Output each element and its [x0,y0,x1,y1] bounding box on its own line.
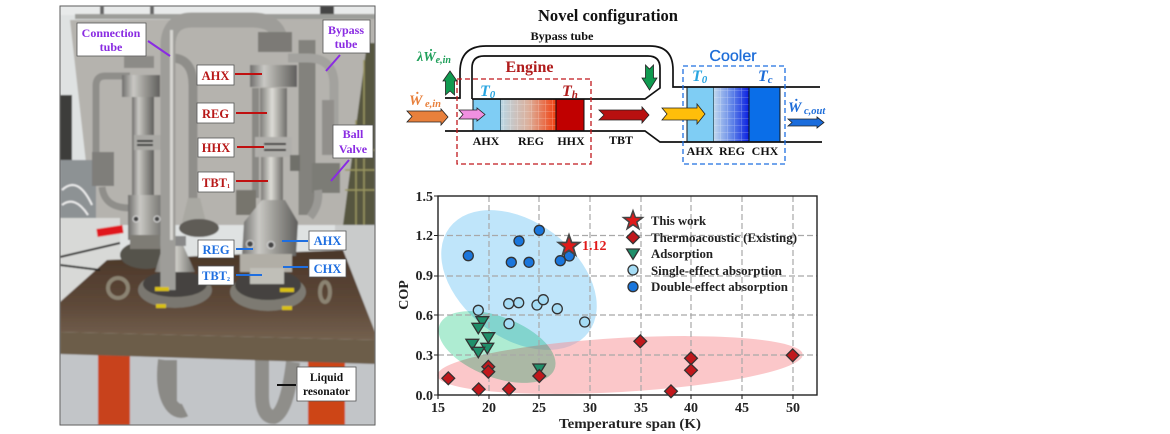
schematic: novel configuration [407,29,826,164]
arrow: TBT red [599,107,649,123]
arrow: work out [788,117,824,128]
temperature labels: h [572,89,578,101]
label: liquid resonator: resonator [303,386,350,398]
annotation arrows on photo [148,41,349,385]
legend: Double-effect absorption [651,279,789,294]
value label: 1.12 [582,239,606,254]
axis tick labels: 0.0 [416,389,433,404]
temperature labels: T [758,68,768,85]
series: thermoacoustic existing [442,335,799,398]
block: cooler REG [714,87,749,142]
label: TBT2: 2 [227,277,230,283]
label: HHX [198,138,234,157]
axis tick labels: 50 [786,401,800,416]
work labels [409,47,826,117]
label: ball valve: Valve [339,142,368,156]
block: engine AHX [473,99,501,131]
label: ball valve [333,125,373,158]
temperature labels: T [480,83,490,100]
axis tick labels [416,190,800,416]
label: liquid resonator [297,367,356,401]
arrow: yellow [662,104,705,124]
component labels [473,133,779,158]
label: ball valve: Ball [343,127,364,141]
legend: Thermoacoustic (Existing) [651,230,797,245]
cooler dashed box [683,66,785,164]
component labels: REG [719,144,745,158]
component labels: HHX [557,134,585,148]
label: REG cooler [198,240,234,258]
work labels: e,in [422,99,441,110]
arrow: work in [407,109,448,125]
title: Novel configuration [538,6,678,25]
label: TBT1: TBT [202,176,227,190]
axis tick labels: 35 [634,401,648,416]
component labels: TBT [609,133,633,147]
axis tick labels: 0.3 [416,349,433,364]
block: HHX [556,99,584,131]
label: AHX cooler [309,231,346,250]
arrow: green down [642,65,657,90]
work labels: λẆ [417,50,436,65]
arrow: pink [459,108,485,121]
axis tick labels: 15 [431,401,445,416]
label: TBT1: 1 [227,184,230,190]
label: CHX: CHX [314,262,341,276]
axis tick labels: 45 [735,401,749,416]
work labels: c,out [801,106,826,117]
label: TBT2: TBT [202,269,227,283]
label: REG engine: REG [202,107,229,121]
arrow: green up [443,71,457,95]
label: AHX cooler: AHX [314,234,341,248]
photo: thermoacoustic rig [60,6,375,425]
axis tick labels: 0.9 [416,269,433,284]
temperature labels: 0 [702,74,708,86]
legend [624,211,797,294]
engine dashed box [457,79,591,164]
label: bypass tube [323,20,370,53]
block: cooler AHX [687,87,714,142]
work labels: e,in [436,55,451,66]
legend: This work [651,213,707,228]
label: bypass tube: Bypass [328,23,364,37]
axis tick labels: 0.6 [416,309,433,324]
axis tick labels: 1.5 [416,190,433,205]
temperature labels [480,68,773,101]
cooler heading: Cooler [709,48,757,65]
label: REG cooler: REG [202,243,230,257]
temperature labels: 0 [490,89,496,101]
legend: Single-effect absorption [651,263,783,278]
axis tick labels: 1.2 [416,229,433,244]
label: TBT1 [198,172,234,192]
label: connection tube: Connection [82,26,141,40]
engine heading: Engine [505,59,554,76]
region: double and single effect absorption [415,181,623,379]
block: engine REG [501,99,556,131]
label: bypass tube: tube [335,37,358,51]
component labels: AHX [473,134,500,148]
label: REG engine [197,103,234,123]
bypass tube label: Bypass tube [530,29,594,43]
x axis title: Temperature span (K) [559,417,701,432]
axis tick labels: 40 [684,401,698,416]
series: double-effect absorption [463,225,574,267]
region: adsorption [429,297,565,397]
axis tick labels: 25 [532,401,546,416]
series: adsorption [466,317,546,374]
block: CHX [749,87,780,142]
label: connection tube: tube [100,40,123,54]
work labels: Ẇ [788,100,801,116]
region: thermoacoustic [436,328,804,402]
component labels: AHX [687,144,714,158]
label: HHX: HHX [202,141,230,155]
component labels: REG [518,134,544,148]
y axis title: COP [397,280,412,310]
axis tick labels: 20 [482,401,496,416]
label: AHX engine: AHX [202,69,229,83]
chart: COP vs temperature span [397,181,817,432]
tube walls [445,46,822,142]
label: liquid resonator: Liquid [310,372,344,384]
temperature labels: c [768,74,773,86]
temperature labels: T [562,83,572,100]
label: TBT2 [198,266,234,285]
star: this work [558,235,580,255]
plot frame and ticks [434,196,817,399]
series: single-effect absorption [473,295,590,329]
component labels: CHX [752,144,779,158]
temperature labels: T [692,68,702,85]
label: AHX engine [197,65,234,85]
work labels: Ẇ [409,93,422,109]
label: connection tube [77,23,146,56]
label: CHX [309,259,346,277]
legend: Adsorption [651,246,714,261]
axis tick labels: 30 [583,401,597,416]
